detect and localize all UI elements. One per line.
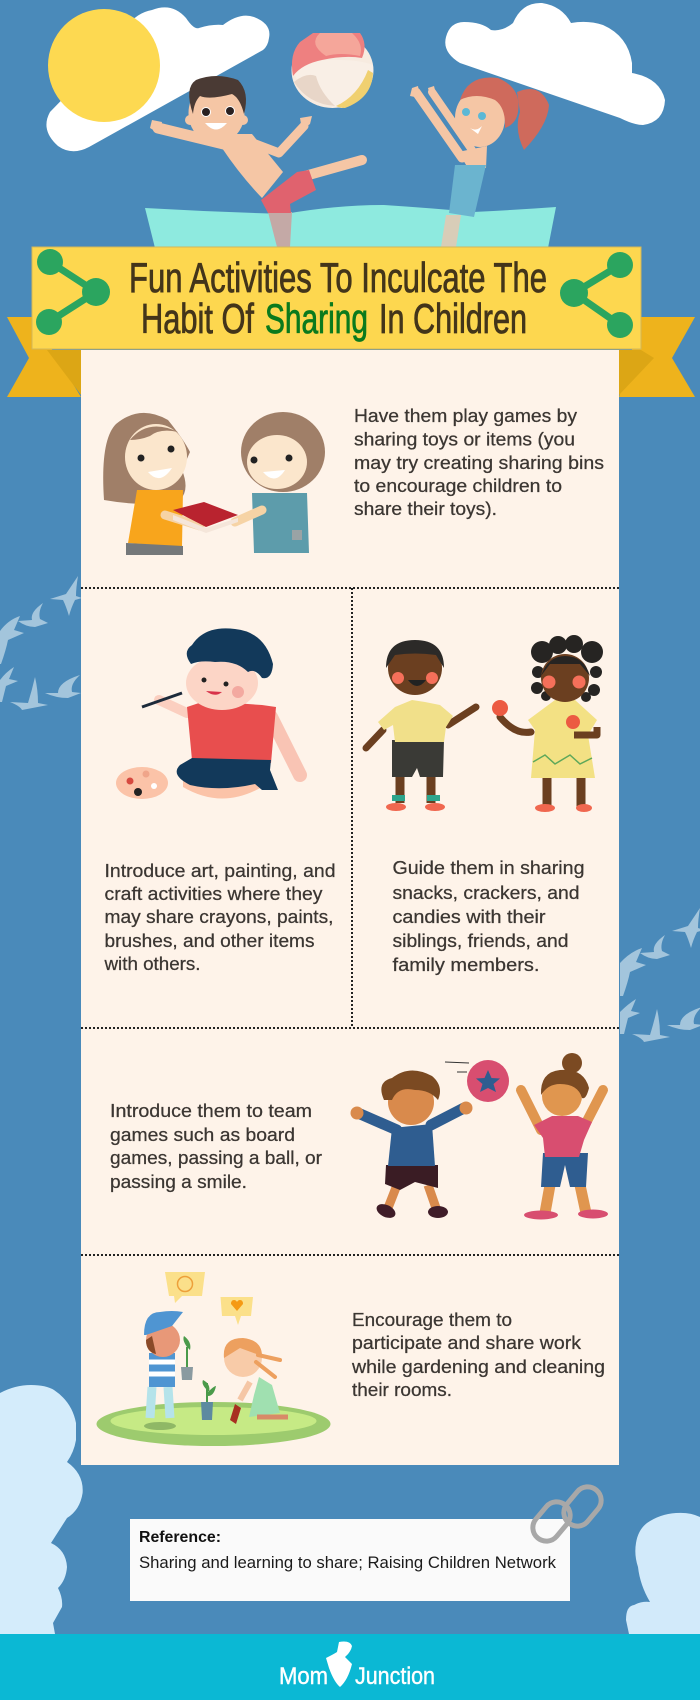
- text: art and craft: with others.: [103, 954, 200, 974]
- text: team games: Introduce them to team: [110, 1101, 312, 1121]
- icon: chain link: [527, 1481, 607, 1547]
- text: sharing toys: sharing toys or items (you: [354, 430, 575, 450]
- text: sharing snacks: siblings, friends, and: [392, 931, 568, 951]
- text: sharing toys: [354, 406, 604, 519]
- illustration: kids sharing snacks: [366, 635, 603, 812]
- illustration: boy painting: [116, 628, 300, 799]
- cloud: bottom left: [0, 1385, 83, 1634]
- title banner: [32, 247, 641, 349]
- text: gardening: [351, 1310, 605, 1400]
- panel: activities background: [81, 350, 619, 1465]
- icon: share right: [560, 252, 633, 338]
- text: team games: games, passing a ball, or: [110, 1148, 322, 1168]
- text: sharing snacks: candies with their: [392, 907, 546, 927]
- title line two: In Children: [379, 295, 527, 342]
- title line two: [141, 295, 527, 342]
- illustration: water pool: [145, 205, 556, 248]
- title line two: Sharing: [265, 295, 368, 342]
- cloud: top right: [445, 3, 665, 125]
- illustration: kids gardening: [96, 1272, 330, 1446]
- reference box: [130, 1519, 570, 1601]
- ribbon: left end: [7, 317, 81, 397]
- ribbon: right end: [619, 317, 695, 397]
- cloud: bottom right: [626, 1513, 700, 1634]
- logo: MomJunction: Mom: [279, 1663, 328, 1690]
- text: sharing snacks: snacks, crackers, and: [392, 883, 580, 903]
- text: gardening: while gardening and cleaning: [351, 1357, 605, 1377]
- text: sharing toys: Have them play games by: [354, 406, 577, 426]
- reference box: Sharing and learning to share; Raising Children Network: [139, 1554, 557, 1572]
- illustration: kids passing a ball: [350, 1053, 608, 1221]
- reference box: Reference:: [139, 1529, 221, 1546]
- cloud: top left: [46, 7, 269, 151]
- title line two: Habit Of: [141, 295, 254, 342]
- text: gardening: Encourage them to: [352, 1310, 512, 1330]
- logo: MomJunction: Junction: [355, 1663, 435, 1690]
- text: team games: passing a smile.: [110, 1172, 247, 1192]
- text: sharing toys: may try creating sharing bins: [354, 453, 604, 473]
- text: gardening: participate and share work: [352, 1333, 582, 1353]
- text: sharing snacks: [392, 858, 584, 975]
- text: art and craft: Introduce art, painting, and: [104, 861, 336, 881]
- text: art and craft: [103, 861, 335, 974]
- icon: sun: [48, 9, 160, 122]
- text: sharing toys: share their toys).: [354, 499, 497, 519]
- text: art and craft: craft activities where they: [104, 884, 322, 904]
- illustration: girl playing in the water: [410, 77, 549, 247]
- logo: MomJunction: [279, 1642, 435, 1690]
- footer band: [0, 1634, 700, 1700]
- text: sharing snacks: family members.: [392, 955, 540, 975]
- text: sharing toys: to encourage children to: [354, 476, 562, 496]
- icon: flock of birds left: [0, 576, 82, 710]
- title line one: Fun Activities To Inculcate The: [129, 254, 547, 301]
- text: art and craft: brushes, and other items: [104, 931, 314, 951]
- illustration: two kids sharing a book: [103, 412, 325, 555]
- text: art and craft: may share crayons, paints,: [104, 907, 334, 927]
- icon: share left: [36, 249, 110, 335]
- icon: beach ball: [292, 33, 374, 108]
- icon: flock of birds right: [620, 908, 700, 1042]
- illustration: boy playing in the water: [150, 76, 362, 247]
- text: team games: games such as board: [110, 1125, 295, 1145]
- text: sharing snacks: Guide them in sharing: [392, 858, 584, 878]
- text: team games: [110, 1101, 322, 1192]
- text: gardening: their rooms.: [352, 1380, 452, 1400]
